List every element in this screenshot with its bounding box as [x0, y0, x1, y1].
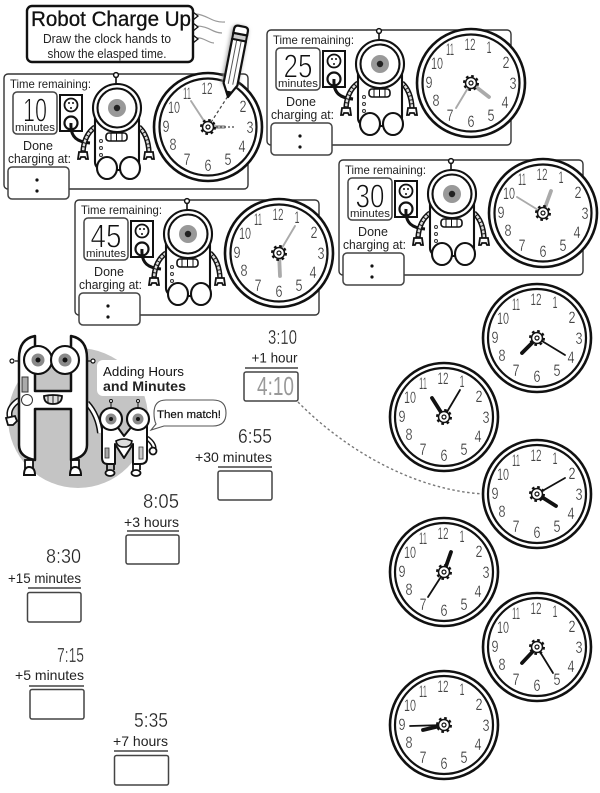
panel: 30 minutes: Done: [358, 225, 388, 239]
clock: match B: 11: [419, 374, 427, 393]
panel: 25 minutes: 2: [502, 53, 510, 72]
clock: match E: 3: [576, 638, 582, 657]
clock: match C: [483, 440, 591, 548]
panel: 30 minutes: 10: [503, 184, 515, 203]
panel: 10 minutes: 7: [184, 150, 190, 169]
clock: match D: 7: [420, 595, 426, 614]
panel: 10 minutes: 6: [204, 156, 212, 175]
icon: pencil: [219, 25, 249, 98]
problem: 5:35 plus 7 hours: +7 hours: [113, 733, 168, 749]
panel: 45 minutes: 9: [234, 243, 240, 262]
panel: 25 minutes: 7: [446, 106, 454, 125]
title box: [27, 6, 225, 62]
clock: match D: 10: [404, 543, 416, 562]
problem: 8:30 plus 15 minutes: 8:30: [46, 546, 81, 568]
clock: match D: 8: [406, 580, 412, 599]
clock: match A: 8: [498, 346, 506, 365]
clock: match E: 6: [534, 676, 540, 695]
clock: match B: 4: [474, 427, 482, 446]
panel: 25 minutes: 10: [431, 54, 443, 73]
panel: 25 minutes: 12: [464, 35, 476, 54]
panel: 30 minutes: 1: [558, 168, 564, 187]
heading: adding hours and minutes: Adding Hours: [103, 364, 185, 379]
problem: 7:15 plus 5 minutes: +5 minutes: [15, 667, 84, 683]
clock: match A: 2: [568, 308, 576, 327]
problem: 3:10 plus 1 hour: 3:10: [268, 327, 297, 349]
panel: 25 minutes: Time remaining:: [273, 33, 354, 47]
panel: 45 minutes: 8: [240, 261, 248, 280]
panel: 30 minutes: 2: [574, 183, 582, 202]
clock: match C: 5: [554, 517, 560, 536]
title box: Draw the clock hands to: [43, 32, 171, 46]
clock: match F: 3: [482, 716, 490, 735]
clock: match B: 6: [440, 446, 448, 465]
problem: 6:55 plus 30 minutes: [195, 426, 272, 500]
panel: 10 minutes: 9: [162, 117, 170, 136]
panel: 45 minutes: 45: [90, 218, 122, 254]
clock: match F: 6: [440, 754, 448, 773]
heading: adding hours and minutes: [97, 360, 189, 396]
panel: 25 minutes: 25: [284, 48, 312, 84]
clock: match C: 4: [568, 504, 574, 523]
panel: 25 minutes: charging at:: [271, 108, 334, 122]
problem: 6:55 plus 30 minutes: 6:55: [238, 426, 272, 448]
clock: match D: 5: [460, 595, 468, 614]
clock: match E: [483, 593, 591, 701]
clock: match E: 11: [512, 604, 520, 623]
clock: match F: 7: [420, 748, 426, 767]
clock: match A: 1: [552, 293, 558, 312]
clock: match F: 9: [398, 715, 406, 734]
problem: 5:35 plus 7 hours: 5:35: [134, 710, 168, 732]
clock: match D: 9: [398, 562, 406, 581]
panel: 30 minutes: 7: [518, 236, 526, 255]
clock: match C: 7: [512, 517, 520, 536]
clock: match A: 7: [512, 361, 520, 380]
panel: 25 minutes: Done: [286, 95, 316, 109]
clock: match E: 2: [568, 617, 576, 636]
clock: match C: 1: [552, 449, 558, 468]
clock: match D: 12: [438, 524, 448, 543]
problem: 8:05 plus 3 hours: 8:05: [143, 491, 179, 513]
panel: 45 minutes: 12: [272, 205, 284, 224]
robot mascots: H and M: [6, 336, 156, 488]
panel: 30 minutes: 9: [498, 203, 504, 222]
clock: match D: 6: [440, 601, 448, 620]
title box: show the elasped time.: [48, 47, 166, 61]
panel: 30 minutes: minutes: [350, 208, 391, 220]
heading: adding hours and minutes: and Minutes: [103, 378, 186, 394]
panel: 10 minutes: Time remaining:: [10, 77, 91, 91]
clock: match B: 12: [438, 369, 448, 388]
panel: 45 minutes: 1: [294, 208, 300, 227]
clock: match F: 8: [406, 733, 412, 752]
clock: match C: 12: [530, 446, 542, 465]
clock: match B: 5: [460, 440, 468, 459]
clock: match B: 2: [476, 387, 482, 406]
clock: match A: 5: [554, 361, 560, 380]
panel: 30 minutes: 5: [560, 236, 566, 255]
clock: match B: 9: [398, 407, 406, 426]
problem: 5:35 plus 7 hours: [113, 710, 168, 785]
panel: 10 minutes: minutes: [15, 122, 56, 134]
clock: match E: 9: [492, 637, 498, 656]
panel: 45 minutes: 10: [239, 224, 251, 243]
panel: 45 minutes: [75, 199, 333, 325]
clock: match B: 3: [482, 408, 490, 427]
clock: match C: 8: [498, 502, 506, 521]
panel: 10 minutes: 10: [23, 92, 47, 128]
panel: 10 minutes: 5: [224, 150, 232, 169]
clock: match B: 8: [406, 425, 412, 444]
panel: 25 minutes: 8: [432, 91, 440, 110]
clock: match D: 3: [482, 563, 490, 582]
clock: match A: 11: [512, 295, 520, 314]
panel: 10 minutes: 3: [246, 118, 254, 137]
clock: match C: 2: [568, 464, 576, 483]
clock: match A: [483, 284, 591, 392]
panel: 30 minutes: 3: [582, 204, 588, 223]
panel: 30 minutes: 4: [574, 223, 580, 242]
clock: match D: [390, 518, 498, 626]
clock: match B: 1: [460, 372, 464, 391]
panel: 30 minutes: 11: [518, 170, 526, 189]
panel: 10 minutes: 8: [170, 135, 176, 154]
clock: match A: 9: [492, 328, 498, 347]
clock: match D: 2: [476, 542, 482, 561]
panel: 30 minutes: 8: [504, 221, 512, 240]
clock: match F: 4: [474, 735, 482, 754]
panel: 30 minutes: 12: [536, 165, 548, 184]
clock: match B: [390, 363, 498, 471]
problem: 3:10 plus 1 hour: 4:10: [257, 371, 294, 401]
problem: 8:05 plus 3 hours: [124, 491, 179, 564]
clock: match E: 5: [554, 670, 560, 689]
panel: 45 minutes: charging at:: [79, 278, 142, 292]
clock: match D: 1: [460, 527, 464, 546]
clock: match D: 4: [474, 582, 482, 601]
clock: match E: 12: [530, 599, 542, 618]
panel: 45 minutes: 3: [318, 244, 324, 263]
clock: match A: 3: [576, 329, 582, 348]
clock: match C: 9: [492, 484, 498, 503]
panel: 30 minutes: 30: [356, 178, 384, 214]
clock: match E: 10: [497, 618, 509, 637]
clock: match A: 12: [530, 290, 542, 309]
panel: 25 minutes: 3: [510, 74, 516, 93]
panel: 45 minutes: 5: [296, 276, 302, 295]
clock: match A: 10: [497, 309, 509, 328]
panel: 25 minutes: 4: [502, 93, 508, 112]
panel: 10 minutes: 10: [168, 98, 180, 117]
clock: match F: 10: [404, 696, 416, 715]
panel: 10 minutes: [4, 73, 262, 199]
problem: 3:10 plus 1 hour: [244, 327, 298, 401]
panel: 25 minutes: 11: [446, 40, 454, 59]
panel: 30 minutes: Time remaining:: [345, 163, 426, 177]
clock: match F: 12: [438, 677, 448, 696]
panel: 25 minutes: 9: [426, 73, 432, 92]
panel: 25 minutes: minutes: [278, 78, 319, 90]
clock: match F: 5: [460, 748, 468, 767]
panel: 45 minutes: 7: [254, 276, 262, 295]
callout: then match: [151, 400, 226, 430]
panel: 25 minutes: 1: [486, 38, 492, 57]
panel: 45 minutes: 4: [310, 263, 316, 282]
clock: match A: 4: [568, 348, 574, 367]
panel: 45 minutes: 6: [276, 282, 282, 301]
problem: 7:15 plus 5 minutes: 7:15: [57, 645, 84, 667]
problem: 7:15 plus 5 minutes: [15, 645, 84, 719]
panel: 25 minutes: 6: [468, 112, 474, 131]
clock: match F: 2: [476, 695, 482, 714]
panel: 45 minutes: Done: [94, 265, 124, 279]
panel: 10 minutes: 4: [238, 137, 246, 156]
panel: 30 minutes: [339, 159, 597, 285]
title box: Robot Charge Up: [31, 8, 191, 31]
clock: match C: 6: [534, 523, 540, 542]
clock: match F: 11: [419, 682, 427, 701]
panel: 10 minutes: 12: [202, 79, 212, 98]
connector: example match line: [298, 402, 484, 494]
panel: 45 minutes: minutes: [86, 248, 127, 260]
clock: match C: 3: [576, 485, 582, 504]
panel: 30 minutes: charging at:: [343, 238, 406, 252]
panel: 10 minutes: 2: [240, 97, 246, 116]
clock: match E: 7: [512, 670, 520, 689]
clock: match C: 11: [512, 451, 520, 470]
clock: match B: 10: [404, 388, 416, 407]
clock: match B: 7: [420, 440, 426, 459]
panel: 45 minutes: 2: [310, 223, 318, 242]
panel: 10 minutes: charging at:: [8, 152, 71, 166]
clock: match C: 10: [497, 465, 509, 484]
clock: match E: 1: [552, 602, 558, 621]
problem: 8:30 plus 15 minutes: [8, 546, 81, 622]
panel: 10 minutes: Done: [23, 139, 53, 153]
callout: then match: Then match!: [157, 409, 221, 421]
panel: 25 minutes: [267, 29, 525, 155]
problem: 8:30 plus 15 minutes: +15 minutes: [8, 570, 81, 586]
clock: match F: 1: [460, 680, 464, 699]
panel: 25 minutes: 5: [488, 106, 494, 125]
clock: match D: 11: [419, 529, 427, 548]
panel: 30 minutes: 6: [540, 242, 546, 261]
problem: 3:10 plus 1 hour: +1 hour: [252, 350, 298, 366]
clock: match A: 6: [534, 367, 540, 386]
clock: match F: [390, 671, 498, 779]
clock: match E: 4: [568, 657, 574, 676]
panel: 10 minutes: 11: [183, 84, 191, 103]
clock: match E: 8: [498, 655, 506, 674]
panel: 45 minutes: 11: [254, 210, 262, 229]
panel: 45 minutes: Time remaining:: [81, 203, 162, 217]
problem: 8:05 plus 3 hours: +3 hours: [124, 514, 179, 530]
problem: 6:55 plus 30 minutes: +30 minutes: [195, 449, 272, 465]
